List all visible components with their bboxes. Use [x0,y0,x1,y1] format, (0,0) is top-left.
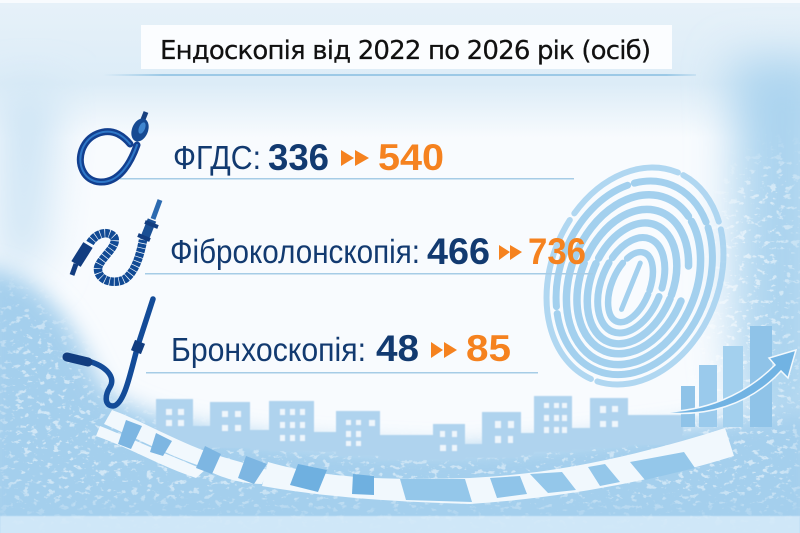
icon: bronchoscope [67,299,153,406]
bar chart with rising arrow [660,326,796,427]
row: Бронхоскопія: 85 [466,328,511,369]
road with blue blocks [96,410,734,504]
title box: Ендоскопія від 2022 по 2026 рік (осіб) [160,36,651,66]
row: Бронхоскопія: 48 [376,328,419,369]
row: Фіброколоноскопія: 466 [427,231,490,272]
row: ФГДС: 336 [268,137,329,178]
row: Бронхоскопія [146,328,538,374]
title underline [103,74,696,76]
row: ФГДС: ФГДС: [173,139,261,176]
row: ФГДС: 540 [378,137,444,178]
cityscape [156,396,683,460]
icon: gastroscope [80,112,152,182]
row: Фіброколоноскопія [145,231,593,274]
row: Фіброколоноскопія: 736 [528,231,586,272]
fingerprint [515,141,755,411]
title box [141,25,672,69]
icon: fibrocolonoscope [72,200,160,282]
row: Бронхоскопія: Бронхоскопія: [171,331,366,368]
row: ФГДС [120,137,574,180]
row: Фіброколоноскопія: Фіброколонскопія: [170,233,420,270]
